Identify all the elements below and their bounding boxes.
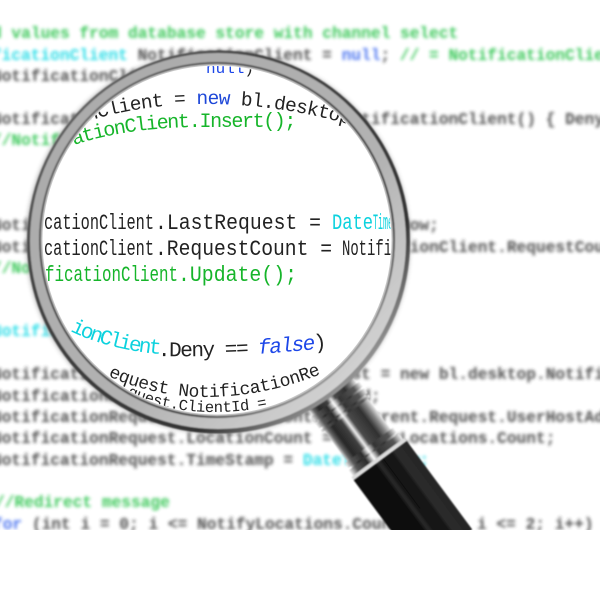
blurred background code: d values from database store with channel select [0, 25, 458, 43]
code line: deny check: ionClient [71, 319, 160, 354]
magnified code [45, 66, 391, 412]
magnifying lens: Time [373, 210, 393, 236]
code line: last request [45, 213, 391, 234]
code line: update [46, 265, 293, 286]
code line: insert: ationClient.Insert(); [74, 112, 292, 144]
blurred background code: //Redirect message [0, 494, 170, 512]
code line: last request: cationClient [44, 210, 154, 236]
code line: last request: .LastRequest = [155, 210, 321, 236]
code line: last request: Date [332, 210, 373, 236]
blurred background code: for (int i = 0; i <= NotifyLocations.Count [0, 516, 401, 534]
blurred background code: NotificationClient.LastRequest = DateTime.Now; [0, 217, 439, 235]
lens glass [42, 66, 392, 414]
blurred background code: NotificationRequest.TimeStamp = DateTime.Now; [0, 452, 429, 470]
code line: request count: cationClient [44, 236, 154, 262]
metal neck [310, 379, 407, 480]
code line: deny check [71, 319, 323, 360]
black grip [353, 440, 473, 530]
white base strip [0, 530, 600, 600]
code line: notification request: equest NotificationRe [110, 366, 319, 398]
code line: new desktop client: nClient = new bl.desktop. [90, 91, 346, 126]
blurred background code: i <= 2; i++) [477, 516, 594, 534]
code line: deny check: .Deny == false) [162, 334, 323, 360]
code line: update: .Update(); [178, 262, 297, 288]
code line: update: ficationClient [45, 262, 178, 288]
blurred background code: NotificationRequest.ClientId = ClientId; [0, 388, 381, 406]
code line: request count [45, 239, 390, 260]
magnifying lens [24, 48, 412, 436]
lens rim [27, 50, 410, 434]
code line: client id: quest.ClientId = [130, 388, 266, 412]
lens rim shadow [28, 52, 408, 432]
magnifier handle [310, 379, 473, 530]
code line: request count: .RequestCount = [155, 236, 332, 262]
code line: null: null) [206, 60, 254, 78]
blurred background code: NotificationRequest.LocationCount = NotifyLocations.Count; [0, 430, 555, 448]
blurred background code: NotificationClient = new bl.desktop.NotificationClient() { Deny [0, 111, 600, 129]
code line: request count: Notifi [342, 236, 392, 262]
